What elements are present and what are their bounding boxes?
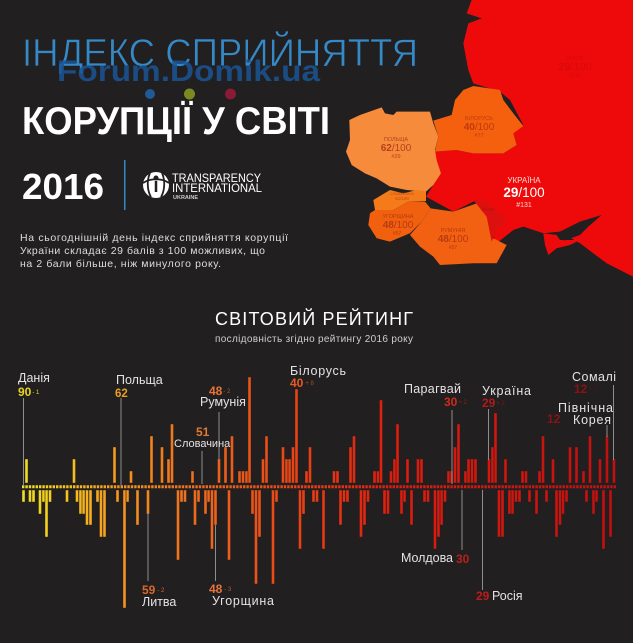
- label: Poland: Польща: [116, 373, 163, 387]
- intro text: на 2 бали більше, ніж минулого року.: [20, 258, 221, 270]
- intro text: [20, 232, 288, 270]
- label: Slovakia: Словачина: [174, 438, 231, 450]
- label: Russia: Росія: [492, 589, 523, 603]
- map: Romania: [410, 203, 507, 265]
- label: Moldova: Молдова: [401, 551, 453, 565]
- map label: Poland: #29: [391, 154, 401, 160]
- label: North Korea: Корея: [573, 413, 611, 427]
- label: Hungary: 48: [209, 582, 222, 596]
- label: Poland: 62: [115, 388, 128, 400]
- logo text: INTERNATIONAL: [172, 183, 263, 195]
- map label: Romania: #57: [449, 245, 457, 251]
- map label: Hungary: #57: [393, 231, 401, 237]
- intro text: України складає 29 балів з 100 можливих, що: [20, 245, 265, 257]
- year: 2016: [22, 166, 104, 207]
- label: Somalia: 12: [574, 382, 587, 396]
- label: Belarus: 40: [290, 376, 303, 390]
- label: Ukraine: 29: [482, 396, 495, 410]
- map label: Hungary: 48/100: [383, 220, 414, 231]
- label: Lithuania: [142, 583, 176, 609]
- label: Lithuania: - 2: [157, 588, 165, 594]
- map: Russia and Ukraine: [426, 0, 633, 277]
- map label: Belarus: #77: [474, 133, 484, 139]
- label: Romania: - 2: [223, 389, 231, 395]
- label: Somalia: [572, 370, 616, 396]
- label: Ukraine: + 2: [496, 401, 506, 407]
- logo text: [172, 173, 263, 201]
- map label: Belarus: [464, 116, 495, 139]
- label: Russia: [476, 589, 523, 603]
- map label: Poland: [381, 137, 412, 160]
- map label: Russia: [558, 56, 592, 79]
- label: Belarus: Білорусь: [290, 364, 346, 378]
- map label: Ukraine: [503, 176, 545, 209]
- label: North Korea: 12: [547, 412, 561, 426]
- label: Paraguay: [404, 382, 468, 409]
- label: Hungary: Угорщина: [212, 594, 274, 608]
- map label: Slovakia: СЛОВАЧЧИНА: [390, 192, 415, 196]
- intro text: На сьогоднішній день індекс сприйняття корупції: [20, 232, 288, 244]
- bar chart: world ranking: [22, 377, 616, 608]
- map label: Slovakia: [390, 192, 415, 201]
- map label: Ukraine: 29/100: [503, 185, 545, 200]
- label: Denmark: [18, 371, 50, 399]
- label: Lithuania: 59: [142, 583, 155, 597]
- chart subheading: послідовність згідно рейтингу 2016 року: [215, 334, 413, 345]
- label: Romania: Румунія: [200, 395, 246, 409]
- map label: Romania: РУМУНІЯ: [441, 228, 465, 234]
- leader lines: [24, 385, 614, 590]
- label: Russia: 29: [476, 589, 490, 603]
- map: Belarus: [433, 86, 523, 153]
- label: Slovakia: [174, 425, 231, 450]
- map label: Hungary: УГОРЩИНА: [383, 214, 414, 220]
- label: Hungary: [209, 582, 274, 608]
- map label: Romania: [438, 228, 469, 251]
- logo: Transparency International: [143, 172, 263, 201]
- divider: [124, 160, 126, 210]
- title line 1: ІНДЕКС СПРИЙНЯТТЯ: [22, 30, 418, 75]
- label: Denmark: 90: [18, 385, 31, 399]
- label: Ukraine: [482, 384, 531, 410]
- map label: Russia: 29/100: [558, 61, 592, 73]
- watermark dots: [145, 88, 236, 100]
- label: Poland: [115, 373, 163, 400]
- label: Somalia: + 2: [588, 387, 598, 393]
- label: Moldova: 30: [456, 552, 470, 566]
- map: Crimea: [543, 233, 580, 255]
- label: Denmark: - 1: [32, 390, 40, 396]
- map label: Belarus: 40/100: [464, 122, 495, 133]
- icon: globe: [143, 172, 169, 198]
- map label: Ukraine: #131: [516, 202, 532, 209]
- label: Ukraine: Україна: [482, 384, 531, 398]
- label: North Korea: [547, 401, 613, 427]
- label: Romania: 48: [209, 384, 222, 398]
- bars below baseline: [22, 490, 612, 608]
- map: Hungary: [368, 202, 431, 242]
- map label: Moldova: 30/100: [481, 207, 495, 212]
- label: Romania: [200, 384, 246, 409]
- label: Somalia: Сомалі: [572, 370, 616, 384]
- map: Moldova: [473, 200, 507, 242]
- chart heading: СВІТОВИЙ РЕЙТИНГ: [215, 308, 413, 329]
- map label: Romania: 48/100: [438, 234, 469, 245]
- label: Belarus: + 8: [305, 381, 315, 387]
- logo text: TRANSPARENCY: [172, 173, 261, 185]
- map: Slovakia: [373, 190, 426, 210]
- label: Slovakia: 51: [196, 425, 210, 439]
- label: Hungary: - 3: [224, 587, 232, 593]
- label: Paraguay: 30: [444, 395, 457, 409]
- map label: Russia: #131: [569, 73, 581, 79]
- bars above baseline: [25, 377, 616, 483]
- logo text: UKRAINE: [173, 195, 198, 201]
- label: Belarus: [290, 364, 346, 390]
- label: Paraguay: + 2: [458, 400, 468, 406]
- map label: Russia: РОСІЯ: [566, 56, 584, 62]
- map: Sea of Azov: [560, 215, 602, 241]
- map label: Ukraine: УКРАЇНА: [507, 176, 541, 185]
- map label: Slovakia: 51/100: [395, 196, 409, 201]
- map label: Poland: 62/100: [381, 143, 412, 154]
- map: Poland: [346, 107, 441, 192]
- map of Eastern Europe: [346, 0, 633, 277]
- map label: Belarus: БІЛОРУСЬ: [465, 116, 493, 122]
- label: North Korea: Північна: [558, 401, 613, 415]
- map label: Poland: ПОЛЬЩА: [384, 137, 408, 143]
- label: Lithuania: Литва: [142, 595, 176, 609]
- watermark: Forum.Domik.ua: [57, 55, 320, 88]
- title line 2: КОРУПЦІЇ У СВІТІ: [22, 100, 330, 143]
- map label: Hungary: [383, 214, 414, 237]
- baseline: [22, 485, 616, 488]
- label: Paraguay: Парагвай: [404, 382, 461, 396]
- label: Denmark: Данія: [18, 371, 50, 385]
